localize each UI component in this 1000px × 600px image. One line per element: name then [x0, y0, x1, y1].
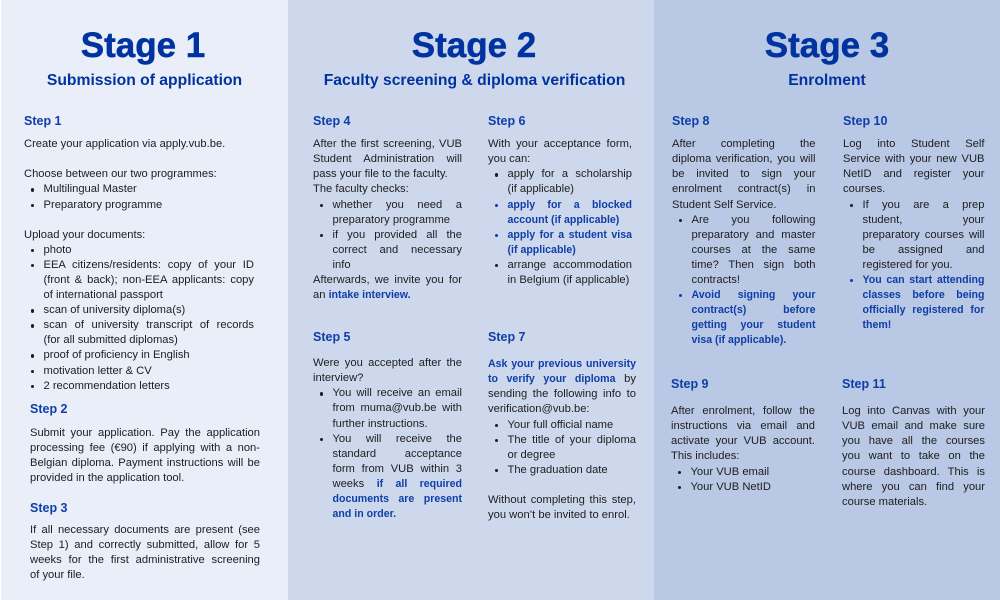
text block: step 1: 2 recommendation letters — [44, 380, 170, 392]
text block: step 1 — [24, 114, 254, 392]
text block: step 5: You will receive an email — [332, 387, 462, 399]
text block: step 10: Service with your new VUB — [843, 153, 984, 165]
panel: stage 3 — [654, 0, 1000, 600]
subheading: faculty screening and diploma verification: Faculty screening & diploma verification — [324, 72, 625, 88]
text block: step 10: courses. — [843, 183, 885, 195]
text block: step 7: Your full official name — [508, 418, 613, 430]
text block: step 1: Create your application via apply.vub.be. — [24, 138, 225, 150]
text block: step 10: Log into Student Self — [843, 138, 984, 150]
text block: step 6: apply for a scholarship — [508, 168, 632, 180]
text block: step 7: verification@vub.be: — [488, 403, 590, 415]
text block: step 11: you want to take on the — [842, 450, 985, 462]
text block: step 10: preparatory courses will — [862, 229, 984, 241]
text block: step 6: in Belgium (if applicable) — [508, 274, 629, 286]
text block: step 6: apply for a blocked — [508, 198, 632, 210]
text block: step 11: where you can find your — [842, 481, 985, 493]
text block: step 6: arrange accommodation — [508, 259, 632, 271]
text block: step 5: You will receive the — [332, 433, 462, 445]
text block: step 6: (if applicable) — [508, 183, 574, 195]
text block: step 4 — [313, 114, 462, 301]
panel: stage 1 — [1, 0, 288, 600]
text block: step 1: proof of proficiency in English — [44, 349, 190, 361]
text block: step 6 — [488, 114, 632, 286]
text block: step 1: motivation letter & CV — [44, 365, 152, 377]
text block: step 4: The faculty checks: — [313, 183, 409, 195]
text block: step 2: provided in the application tool. — [30, 472, 184, 484]
text block: step 2 — [30, 402, 260, 484]
text block: step 7: The title of your diploma — [508, 434, 636, 446]
text block: step 8: contract(s) before — [692, 304, 816, 316]
text block: step 9: After enrolment, follow the — [671, 405, 815, 417]
text block: step 8: Step 8 — [672, 114, 710, 128]
text block: step 1: Choose between our two programmes: — [24, 168, 217, 180]
text block: step 3: If all necessary documents are present (see — [30, 524, 260, 536]
text block: step 10: student, your — [862, 214, 984, 226]
text block: step 11: VUB email and make sure — [842, 420, 985, 432]
text block: step 8: be invited to sign your — [672, 168, 816, 180]
text block: step 10: You can start attending — [862, 274, 984, 286]
text block: step 6: apply for a student visa — [508, 229, 632, 241]
text block: step 7 — [488, 330, 636, 521]
text block: step 3: Step 1) and correctly submitted, allow for 5 — [30, 539, 260, 551]
heading: stage 1: Stage 1 — [81, 26, 205, 65]
text block: step 10 — [843, 114, 984, 331]
text block: step 8: time? Then sign both — [692, 259, 816, 271]
text block: step 4: Afterwards, we invite you for — [313, 274, 462, 286]
text block: step 10: If you are a prep — [862, 198, 984, 210]
text block: step 5: standard acceptance — [332, 448, 462, 460]
text block: step 4: correct and necessary — [332, 244, 462, 256]
text block: step 1: (for all submitted diplomas) — [44, 334, 178, 346]
text block: step 3: of your file. — [30, 569, 85, 581]
text block: step 1: Preparatory programme — [44, 198, 162, 210]
text block: step 5 — [313, 330, 462, 520]
text block: step 6: you can: — [488, 153, 530, 165]
text block: step 10: classes before being — [862, 289, 984, 301]
text block: step 8: visa (if applicable). — [692, 334, 786, 346]
text block: step 2: processing fee (€90) if applying with a non- — [30, 442, 260, 454]
text block: step 9 — [671, 377, 815, 493]
text block: step 5: from muma@vub.be with — [332, 402, 462, 414]
text block: step 9: This includes: — [671, 450, 739, 462]
text block: step 7: you won’t be invited to enrol. — [488, 509, 630, 521]
text block: step 4: Student Administration will — [313, 153, 462, 165]
text block: step 11: Log into Canvas with your — [842, 405, 985, 417]
text block: step 7: sending the following info to — [488, 388, 636, 400]
heading: stage 2: Stage 2 — [412, 26, 536, 65]
heading: stage 3: Stage 3 — [765, 26, 889, 65]
subheading: submission of application: Submission of application — [47, 72, 242, 88]
text block: step 11: Step 11 — [842, 377, 886, 391]
text block: step 1: EEA citizens/residents: copy of your ID — [44, 259, 254, 271]
text block: step 4: pass your file to the faculty. — [313, 168, 448, 180]
text block: step 5: Were you accepted after the — [313, 357, 462, 369]
text block: step 10: NetID and register your — [843, 168, 984, 180]
text block: step 4: info — [332, 259, 351, 271]
text block: step 10: them! — [862, 319, 891, 331]
text block: step 8: Are you following — [692, 214, 816, 226]
text block: step 11: course dashboard. This is — [842, 466, 985, 478]
text block: step 8: enrolment contract(s) in — [672, 183, 816, 195]
panel: stage 2 — [288, 0, 654, 600]
text block: step 1: scan of university transcript of records — [44, 319, 254, 331]
text block: step 6: account (if applicable) — [508, 214, 619, 226]
text block: step 8: diploma verification, you will — [672, 153, 816, 165]
text block: step 7: to verify your diploma by — [488, 373, 636, 385]
text block: step 1: photo — [44, 244, 72, 256]
text block: step 11 — [842, 377, 985, 508]
text block: step 9: instructions via email and — [671, 420, 815, 432]
text block: step 3: Step 3 — [30, 501, 68, 515]
text block: step 9: Your VUB NetID — [690, 481, 771, 493]
text block: step 8 — [672, 114, 816, 346]
text block: step 5: form from VUB within 3 — [332, 463, 462, 475]
text block: step 6: Step 6 — [488, 114, 526, 128]
text block: step 7: The graduation date — [508, 464, 608, 476]
text block: step 9: activate your VUB account. — [671, 435, 815, 447]
text block: step 10: Step 10 — [843, 114, 887, 128]
text block: step 8: Avoid signing your — [692, 289, 816, 301]
text block: step 2: Submit your application. Pay the application — [30, 427, 260, 439]
text block: step 4: an intake interview. — [313, 289, 411, 301]
text block: step 3: weeks for the first administrative screening — [30, 554, 260, 566]
text block: step 5: weeks if all required — [332, 478, 462, 490]
text block: step 2: Belgian diploma. Payment instructions will be — [30, 457, 260, 469]
text block: step 8: Student Self Service. — [672, 198, 776, 210]
text block: step 4: Step 4 — [313, 114, 351, 128]
text block: step 4: whether you need a — [332, 198, 462, 210]
subheading: enrolment: Enrolment — [788, 72, 866, 88]
text block: step 2: Step 2 — [30, 402, 68, 416]
text block: step 10: officially registered for — [862, 304, 984, 316]
text block: step 1: of international passport — [44, 289, 163, 301]
text block: step 7: Ask your previous university — [488, 358, 636, 370]
text block: step 1: Upload your documents: — [24, 229, 145, 241]
text block: step 8: getting your student — [692, 319, 816, 331]
text block: step 3 — [30, 501, 260, 581]
text block: step 4: preparatory programme — [332, 214, 450, 226]
text block: step 5: documents are present — [332, 493, 462, 505]
text block: step 8: After completing the — [672, 138, 816, 150]
text block: step 11: course materials. — [842, 496, 927, 508]
text block: step 11: you have all the courses — [842, 435, 985, 447]
text block: step 5: further instructions. — [332, 418, 428, 430]
text block: step 9: Your VUB email — [690, 466, 769, 478]
text block: step 1: scan of university diploma(s) — [44, 304, 185, 316]
text block: step 1: Multilingual Master — [44, 183, 137, 195]
text block: step 6: With your acceptance form, — [488, 138, 632, 150]
text block: step 10: be assigned and — [862, 244, 984, 256]
text block: step 4: After the first screening, VUB — [313, 138, 462, 150]
text block: step 5: interview? — [313, 372, 363, 384]
text block: step 7: Step 7 — [488, 330, 526, 344]
text block: step 8: courses at the same — [692, 244, 816, 256]
text block: step 8: contracts! — [692, 274, 740, 286]
text block: step 1: Step 1 — [24, 114, 62, 128]
text block: step 5: and in order. — [332, 508, 396, 520]
text block: step 7: or degree — [508, 449, 555, 461]
text block: step 1: (front & back); non-EEA applicants: copy — [44, 274, 254, 286]
text block: step 5: Step 5 — [313, 330, 351, 344]
text block: step 6: (if applicable) — [508, 244, 576, 256]
text block: step 7: Without completing this step, — [488, 494, 636, 506]
text block: step 9: Step 9 — [671, 377, 709, 391]
text block: step 4: if you provided all the — [332, 229, 462, 241]
text block: step 10: registered for you. — [862, 259, 953, 271]
text block: step 8: preparatory and master — [692, 229, 816, 241]
